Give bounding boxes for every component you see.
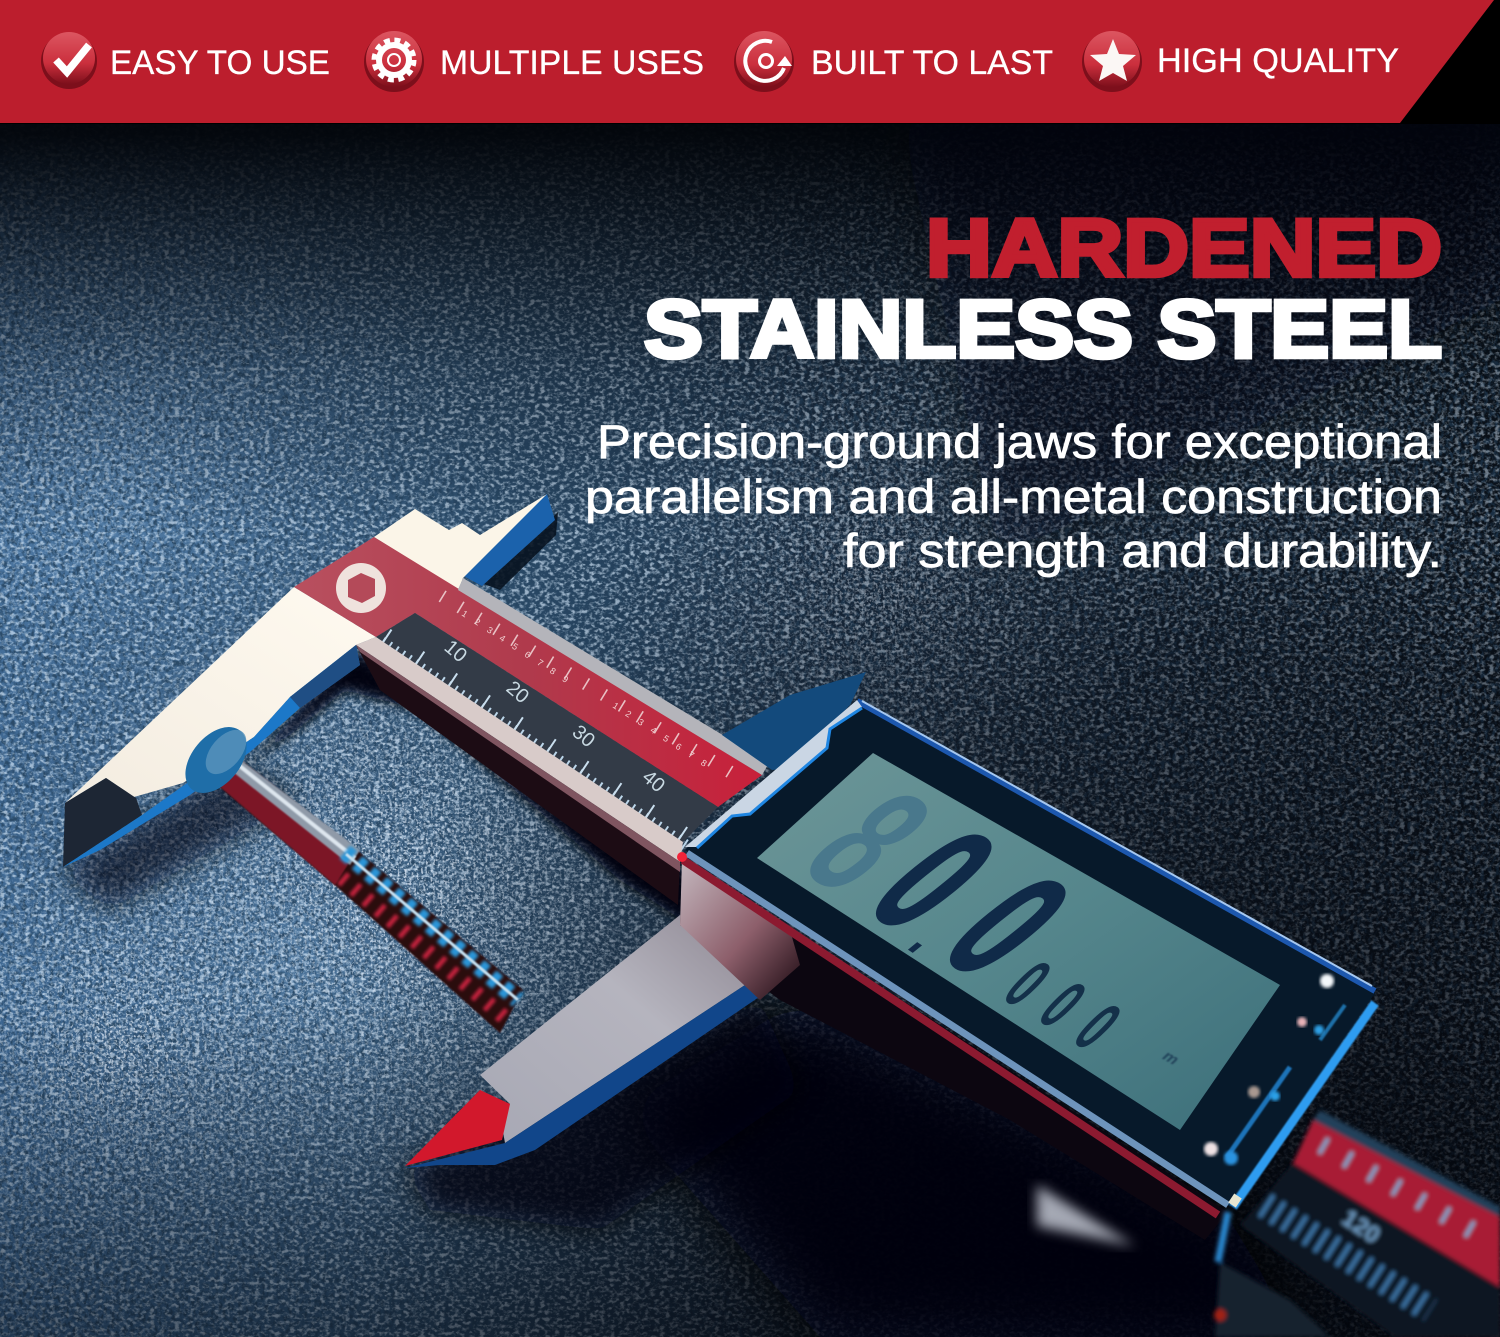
- LCD small digits: 0: [1057, 990, 1137, 1064]
- badge: built to last: [734, 31, 1053, 92]
- LCD reading: 0: [905, 846, 1110, 1006]
- label: BUILT TO LAST: [811, 44, 1053, 82]
- title line: hardened: HARDENED: [926, 203, 1442, 294]
- label: EASY TO USE: [110, 44, 330, 82]
- description text: parallelism and all-metal construction: [585, 470, 1442, 523]
- lower bezel edge and red line: [683, 860, 1218, 1215]
- title line: stainless steel: STAINLESS STEEL: [644, 284, 1442, 375]
- silver frame corner: [685, 700, 862, 847]
- secondary red-band digits: 12345678: [611, 700, 717, 774]
- icon: star: [1082, 31, 1142, 92]
- badge: easy to use: [41, 32, 330, 89]
- decorative ticks: [442, 596, 735, 775]
- inner shadow under the beam: [250, 650, 690, 925]
- icon: beam continuing lower right: 120: [1337, 1205, 1385, 1249]
- LCD small digits: [987, 947, 1137, 1064]
- display buttons: [1204, 974, 1375, 1207]
- icon: upper-right small jaw: [722, 672, 866, 770]
- badge: multiple uses: [364, 31, 704, 92]
- icon: dark scale with ticks: [376, 613, 718, 848]
- icon: lower silver jaw: [405, 915, 762, 1168]
- secondary red-band digits: 123456789: [460, 608, 579, 690]
- screw head: [173, 715, 259, 805]
- icon: beam continuing lower right: [1214, 1110, 1500, 1337]
- icon: gear with circular arrow: [734, 31, 794, 92]
- LCD ghost digit: 8: [766, 761, 971, 921]
- LCD unit mark: m: [1158, 1049, 1183, 1068]
- icon: display body side: [680, 858, 1228, 1240]
- description text: Precision-ground jaws for exceptional: [597, 415, 1442, 468]
- header banner: [0, 0, 1500, 124]
- icon: screw: [173, 715, 523, 1033]
- icon: depth jaw below the body: [1032, 1160, 1135, 1246]
- display LCD: [757, 753, 1280, 1130]
- icon: dark scale with ticks: 10: [440, 636, 471, 667]
- LCD small digits: 0: [987, 947, 1067, 1021]
- label: HIGH QUALITY: [1157, 42, 1399, 80]
- badge: high quality: [1082, 31, 1399, 92]
- icon: dark scale with ticks: 40: [638, 766, 669, 797]
- secondary red-band digits: [460, 608, 717, 774]
- LCD reading: [831, 800, 1110, 1006]
- LCD reading: .: [897, 915, 956, 961]
- description text: for strength and durability.: [843, 524, 1442, 577]
- icon: hex logo on band: [336, 563, 386, 613]
- icon: display bezel: [677, 700, 1375, 1215]
- description text: [585, 415, 1442, 577]
- label: MULTIPLE USES: [440, 44, 704, 82]
- icon: dark scale with ticks: 30: [568, 721, 599, 752]
- icon: caliper lower-left measuring jaw: [63, 587, 376, 867]
- icon: gear: [364, 31, 424, 92]
- icon: check mark: [41, 32, 97, 89]
- icon: caliper upper jaw: [374, 494, 558, 590]
- icon: dark scale with ticks: 20: [502, 677, 533, 708]
- title: [644, 203, 1442, 375]
- icon: red measuring band: [294, 537, 769, 807]
- icon: chrome strip under the scale: [356, 637, 683, 905]
- LCD small digits: 0: [1022, 968, 1102, 1042]
- digital caliper photograph: [63, 494, 1500, 1337]
- LCD reading: 0: [831, 800, 1036, 960]
